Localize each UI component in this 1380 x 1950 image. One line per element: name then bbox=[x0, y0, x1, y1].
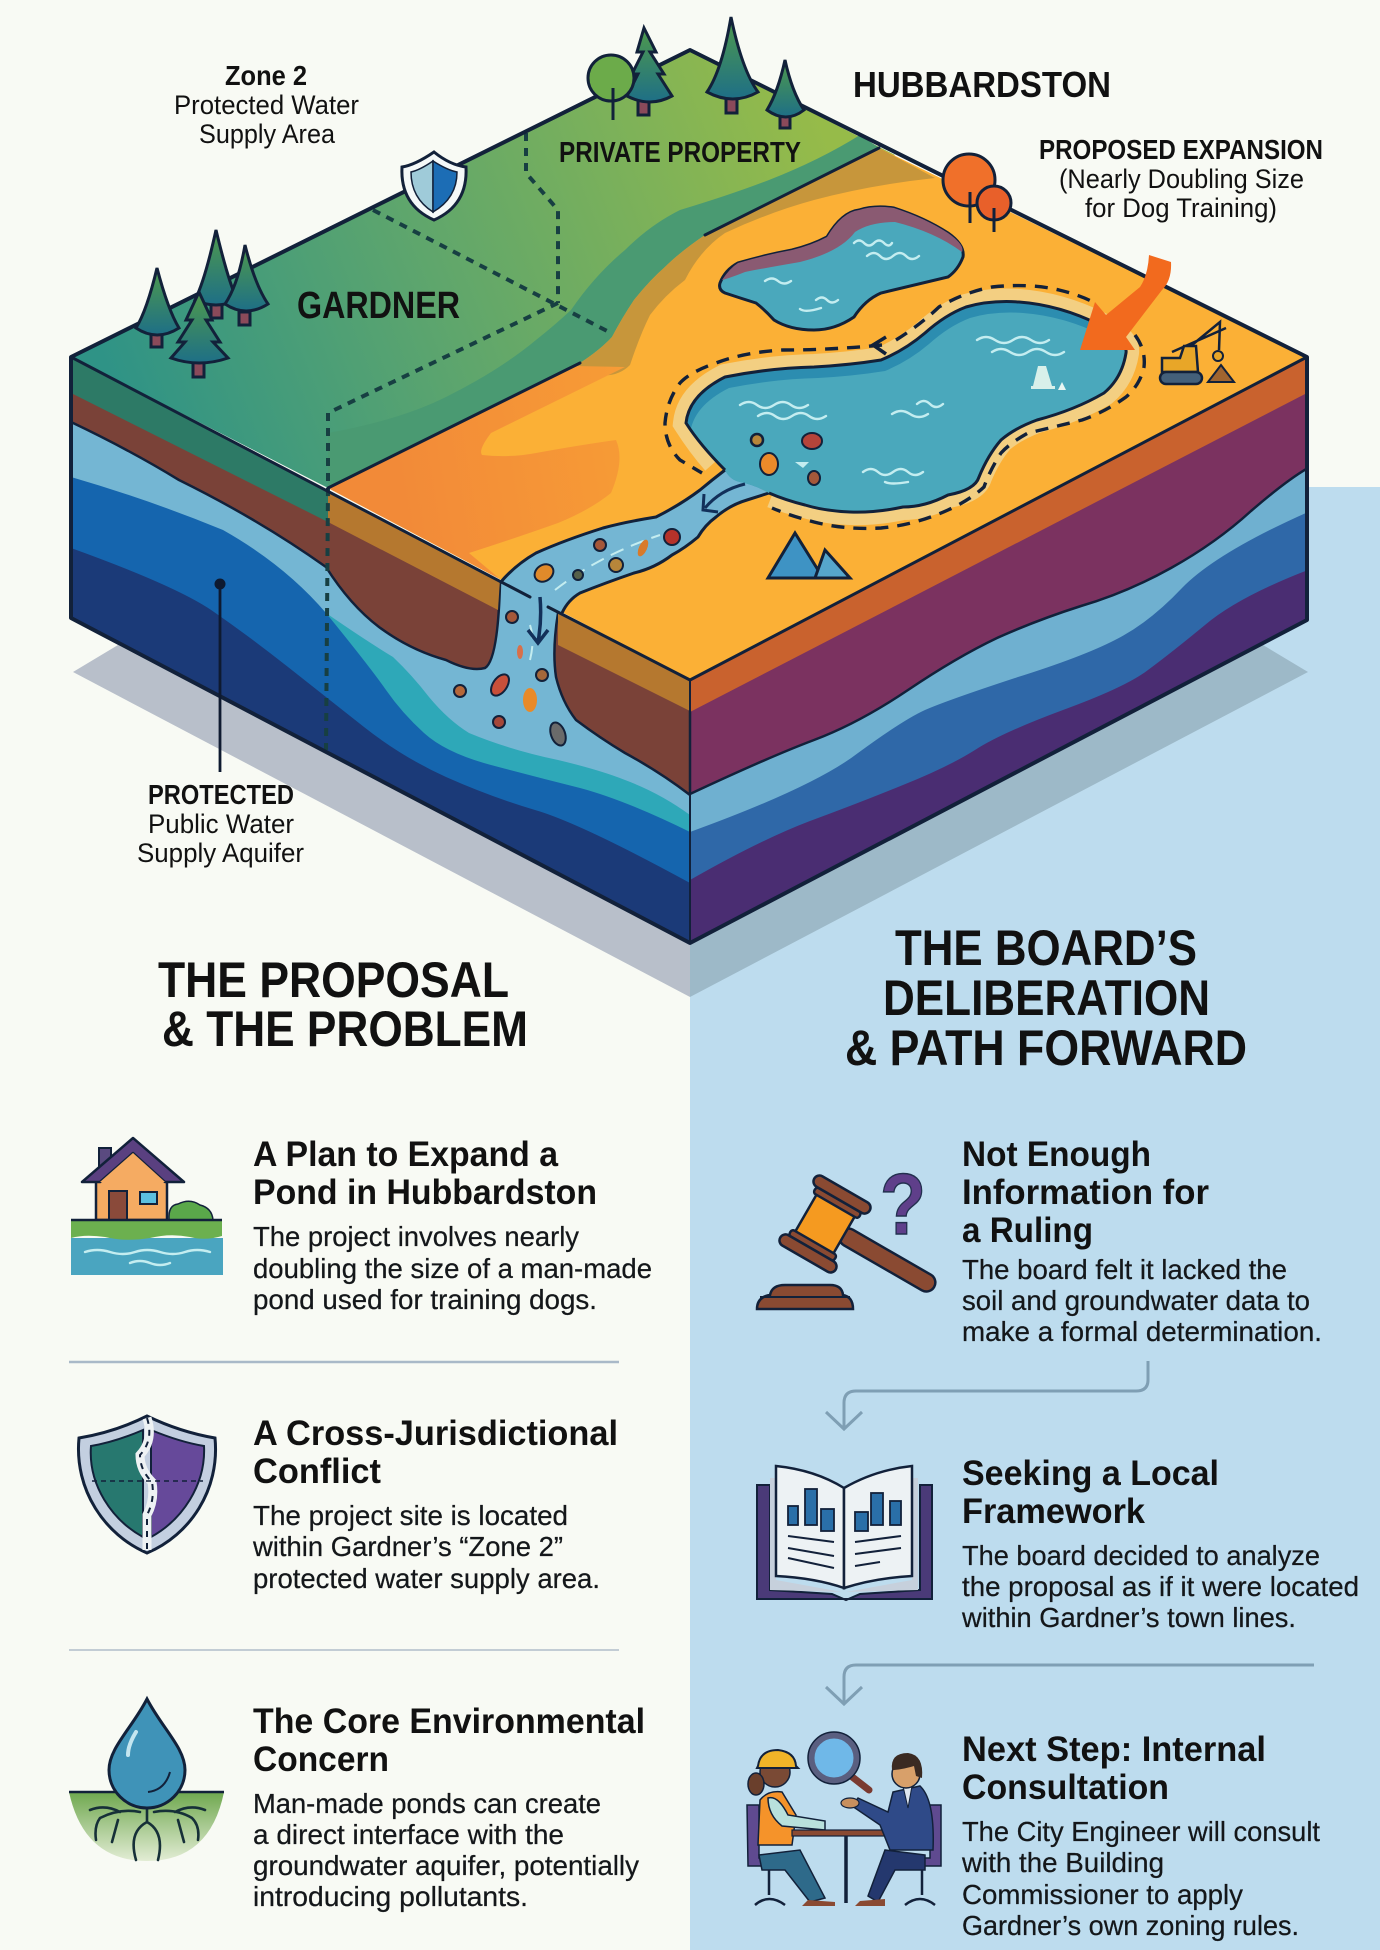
item text: ruling: Not Enough bbox=[962, 1135, 1151, 1174]
item text: framework: within Gardner’s town lines. bbox=[961, 1602, 1296, 1633]
heading: The Board's Deliberation & Path Forward: DELIBERATION bbox=[883, 970, 1210, 1026]
heading: The Board's Deliberation & Path Forward: & PATH FORWARD bbox=[845, 1020, 1247, 1076]
arrow: pond outflow bbox=[703, 484, 745, 512]
panel: cross-jurisdictional conflict bbox=[78, 1414, 618, 1594]
icon: water drop over roots bbox=[69, 1699, 224, 1861]
item text: ruling: soil and groundwater data to bbox=[962, 1285, 1310, 1316]
icon: excavator bbox=[1160, 322, 1234, 384]
top tree group bbox=[588, 17, 804, 128]
top surface: green land bbox=[71, 50, 895, 488]
dashed expansion boundary bbox=[665, 286, 1144, 528]
item text: consultation: Consultation bbox=[962, 1768, 1169, 1807]
icon: mountains bbox=[768, 533, 850, 578]
isometric land block diagram bbox=[60, 17, 1320, 960]
item text: concern: groundwater aquifer, potentially bbox=[253, 1850, 639, 1881]
icon: open book with charts bbox=[757, 1466, 932, 1600]
item text: concern: a direct interface with the bbox=[253, 1819, 564, 1850]
panel: seeking a local framework bbox=[757, 1454, 1359, 1633]
map label: Zone 2: Supply Area bbox=[199, 119, 336, 149]
map label: Proposed Expansion: (Nearly Doubling Size bbox=[1059, 164, 1304, 194]
panel: plan to expand bbox=[71, 1135, 652, 1315]
item text: framework: Framework bbox=[962, 1492, 1146, 1531]
icon: gavel with question mark bbox=[757, 1157, 954, 1322]
item text: framework: The board decided to analyze bbox=[962, 1540, 1320, 1571]
item text: plan: doubling the size of a man-made bbox=[253, 1253, 652, 1284]
map label: Proposed Expansion bbox=[1039, 134, 1323, 223]
pond debris bbox=[751, 433, 822, 485]
item text: conflict bbox=[252, 1414, 618, 1594]
icon: orange trees bbox=[943, 154, 1011, 232]
map label: Protected Aquifer: PROTECTED bbox=[148, 779, 294, 810]
item text: consultation bbox=[961, 1730, 1320, 1941]
ground shadow under block bbox=[73, 645, 1308, 997]
map label: Protected Aquifer: Supply Aquifer bbox=[137, 838, 304, 868]
callout line to aquifer bbox=[214, 578, 226, 772]
main pond bbox=[686, 302, 1130, 523]
item text: concern: The Core Environmental bbox=[253, 1702, 645, 1741]
item text: ruling: The board felt it lacked the bbox=[962, 1254, 1287, 1285]
item text: framework bbox=[961, 1454, 1359, 1633]
item text: ruling bbox=[962, 1135, 1322, 1347]
darker orange zone bbox=[328, 366, 625, 579]
background: blue right panel bbox=[690, 487, 1380, 1950]
item text: ruling: Information for bbox=[962, 1173, 1209, 1212]
item text: concern: Concern bbox=[253, 1740, 389, 1779]
map label: Protected Aquifer bbox=[137, 779, 304, 868]
item text: concern: introducing pollutants. bbox=[253, 1881, 528, 1912]
item text: conflict: A Cross-Jurisdictional bbox=[253, 1414, 618, 1453]
item text: conflict: The project site is located bbox=[253, 1500, 568, 1531]
pond sand rim bbox=[686, 302, 1126, 512]
tan soil band bbox=[575, 148, 935, 375]
stream from pond bbox=[500, 470, 769, 660]
darker green band bbox=[328, 135, 890, 488]
item text: consultation: Gardner’s own zoning rules. bbox=[962, 1910, 1299, 1941]
item text: consultation: The City Engineer will consult bbox=[962, 1816, 1320, 1847]
heading: The Board's Deliberation & Path Forward: THE BOARD’S bbox=[895, 920, 1197, 976]
heading: The Board's Deliberation & Path Forward bbox=[845, 920, 1247, 1076]
map label: Proposed Expansion: PROPOSED EXPANSION bbox=[1039, 134, 1323, 165]
map label: Zone 2: Zone 2 bbox=[225, 60, 307, 91]
arrow: pollutants flow down bbox=[528, 597, 548, 643]
top surface: orange land bbox=[328, 148, 1307, 680]
arrow: step 2 to step 3 bbox=[826, 1665, 1314, 1704]
buoy in pond bbox=[1031, 366, 1066, 390]
heading: The Proposal & The Problem bbox=[158, 952, 528, 1057]
panel: core environmental concern bbox=[69, 1699, 645, 1912]
item text: consultation: Commissioner to apply bbox=[962, 1879, 1243, 1910]
item text: ruling: a Ruling bbox=[962, 1211, 1093, 1250]
icon: zone shield bbox=[402, 152, 466, 220]
icon: gavel with question mark: ? bbox=[880, 1157, 926, 1253]
block outline bbox=[71, 50, 1307, 943]
item text: concern: Man-made ponds can create bbox=[253, 1788, 601, 1819]
left tree group bbox=[136, 230, 268, 377]
panel: not enough information bbox=[757, 1135, 1322, 1347]
dashed town boundary lines bbox=[326, 133, 609, 750]
heading: The Proposal & The Problem: THE PROPOSAL bbox=[158, 952, 509, 1008]
item text: concern bbox=[253, 1702, 645, 1912]
item text: plan: The project involves nearly bbox=[253, 1221, 579, 1252]
map label: Gardner: GARDNER bbox=[297, 285, 460, 327]
item text: conflict: within Gardner’s “Zone 2” bbox=[252, 1531, 563, 1562]
item text: plan bbox=[253, 1135, 652, 1315]
icon: split shield bbox=[78, 1416, 216, 1553]
arrow: step 1 to step 2 bbox=[826, 1361, 1148, 1429]
item text: framework: Seeking a Local bbox=[962, 1454, 1219, 1493]
map label: Hubbardston: HUBBARDSTON bbox=[853, 64, 1111, 105]
right cross-section face bbox=[691, 360, 1305, 940]
item text: conflict: Conflict bbox=[253, 1452, 381, 1491]
icon: house by pond bbox=[71, 1138, 223, 1275]
item text: ruling: make a formal determination. bbox=[962, 1316, 1322, 1347]
stream debris bbox=[454, 529, 680, 748]
panel: next step internal consultation bbox=[747, 1730, 1320, 1941]
item text: framework: the proposal as if it were located bbox=[962, 1571, 1359, 1602]
map label: Private Property: PRIVATE PROPERTY bbox=[559, 137, 801, 169]
item text: plan: A Plan to Expand a bbox=[253, 1135, 559, 1174]
map label: Protected Aquifer: Public Water bbox=[148, 809, 294, 839]
item text: conflict: protected water supply area. bbox=[253, 1563, 600, 1594]
orange expansion arrow bbox=[1080, 255, 1171, 350]
icon: consultation meeting bbox=[747, 1732, 941, 1906]
map label: Zone 2 bbox=[174, 60, 359, 149]
item text: plan: pond used for training dogs. bbox=[253, 1284, 597, 1315]
item text: consultation: Next Step: Internal bbox=[962, 1730, 1266, 1769]
small upper pond bbox=[720, 207, 963, 330]
left cross-section face bbox=[73, 360, 689, 940]
map label: Proposed Expansion: for Dog Training) bbox=[1085, 193, 1277, 223]
item text: consultation: with the Building bbox=[961, 1847, 1164, 1878]
dashed arrow head bbox=[873, 337, 886, 354]
heading: The Proposal & The Problem: & THE PROBLEM bbox=[162, 1001, 528, 1057]
item text: plan: Pond in Hubbardston bbox=[253, 1173, 597, 1212]
map label: Zone 2: Protected Water bbox=[174, 90, 359, 120]
